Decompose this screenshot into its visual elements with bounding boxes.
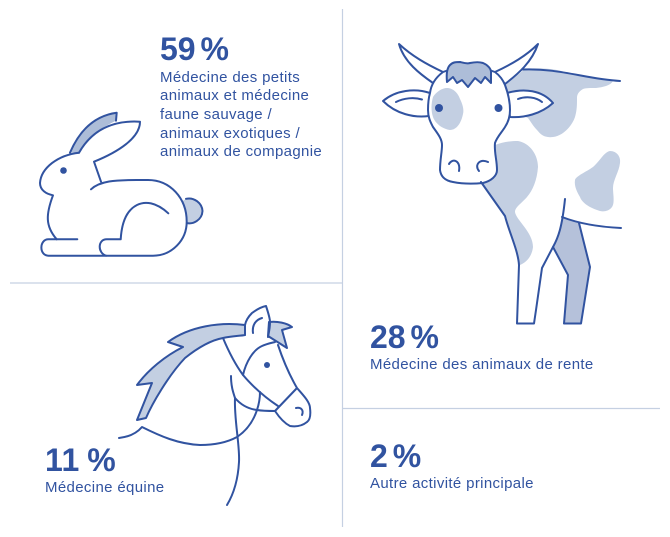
stat: 59%: 59 % [160, 31, 229, 67]
label: small animals [160, 68, 322, 160]
label: small animals: Médecine des petits [160, 68, 300, 86]
stat: 2%: 2 % [370, 438, 421, 474]
icon: horse [119, 306, 310, 505]
label: small animals: animaux de compagnie [160, 143, 322, 160]
label: farm animals: Médecine des animaux de rente [370, 356, 594, 373]
label: small animals: animaux et médecine [160, 87, 309, 104]
stat: 28%: 28 % [370, 319, 439, 355]
icon: cow [383, 44, 621, 324]
label: other activity: Autre activité principale [370, 475, 534, 492]
icon: rabbit [40, 113, 202, 256]
label: small animals: animaux exotiques / [160, 125, 300, 142]
label: equine: Médecine équine [45, 479, 165, 496]
stat: 11%: 11 % [45, 442, 116, 478]
label: small animals: faune sauvage / [160, 106, 272, 123]
